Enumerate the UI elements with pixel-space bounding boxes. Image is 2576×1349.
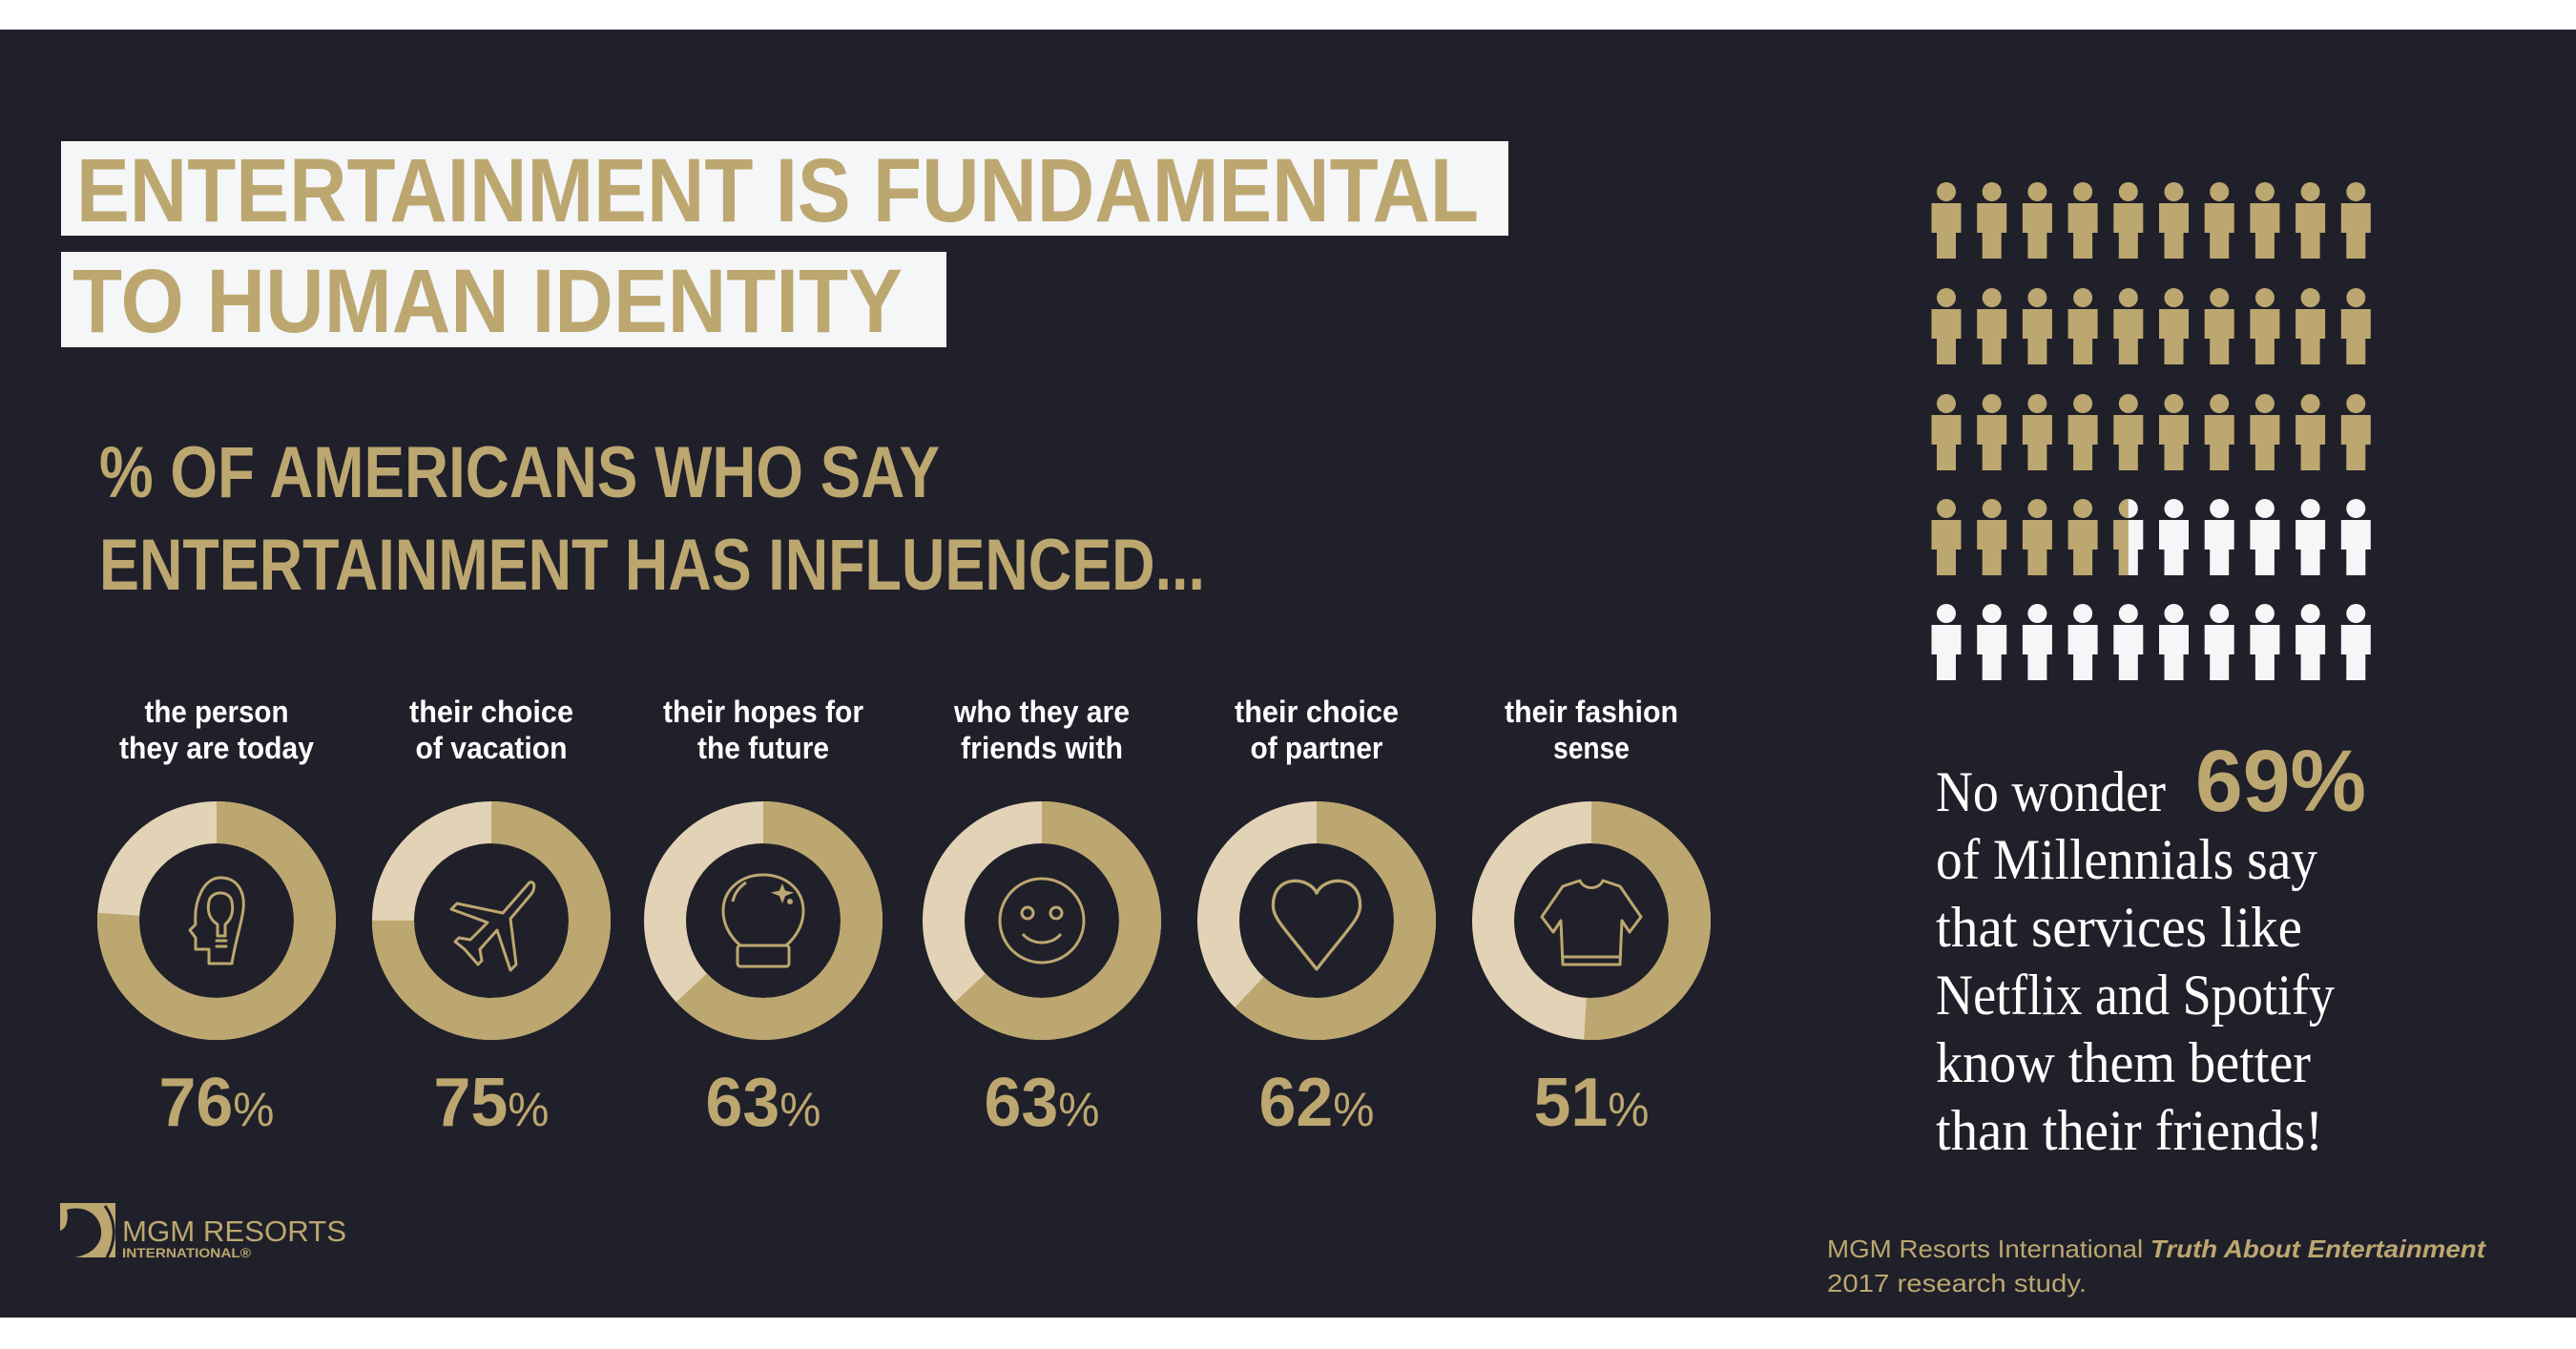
category labels: their hopes for <box>663 695 863 729</box>
source note: MGM Resorts International Truth About Entertainment <box>1827 1235 2486 1263</box>
icon: t-shirt <box>1542 881 1641 965</box>
icon: airplane <box>451 882 534 970</box>
subtitle: % OF AMERICANS WHO SAY <box>99 432 940 513</box>
logo: MGM Resorts: INTERNATIONAL® <box>122 1245 252 1260</box>
icon: heart <box>1273 881 1361 969</box>
category labels: friends with <box>961 731 1123 765</box>
category labels: of partner <box>1250 731 1383 765</box>
callout: 69% of Millennials: 69% <box>2195 733 2366 830</box>
donut: 76% <box>118 822 315 1019</box>
logo: MGM Resorts <box>60 1203 346 1260</box>
subtitle <box>99 432 1205 606</box>
percentages: 75% <box>433 1065 550 1141</box>
title: ENTERTAINMENT IS FUNDAMENTAL <box>76 140 1479 241</box>
callout: 69% of Millennials: than their friends! <box>1936 1099 2323 1162</box>
category labels: their fashion <box>1505 695 1678 729</box>
donut: 75% <box>393 822 590 1019</box>
logo: MGM Resorts: MGM RESORTS <box>122 1214 346 1248</box>
percentages: 76% <box>158 1065 275 1141</box>
pictogram: 69 of 100 people <box>1931 182 2371 680</box>
percentages <box>158 1065 1649 1141</box>
callout: 69% of Millennials: of Millennials say <box>1936 828 2317 891</box>
category labels: they are today <box>119 731 314 765</box>
donut: 63% hopes <box>665 822 862 1019</box>
category labels <box>119 695 1678 765</box>
source note <box>1827 1235 2486 1297</box>
callout: 69% of Millennials: know them better <box>1936 1031 2311 1094</box>
title: TO HUMAN IDENTITY <box>73 251 903 352</box>
percentages: 51% <box>1534 1065 1649 1141</box>
donut: 63% friends <box>944 822 1140 1019</box>
icon: crystal ball <box>723 875 803 966</box>
donut: 51% <box>1493 822 1690 1019</box>
subtitle: ENTERTAINMENT HAS INFLUENCED... <box>99 525 1205 606</box>
callout: 69% of Millennials: that services like <box>1936 896 2302 959</box>
category labels: their choice <box>1235 695 1399 729</box>
icon: head with bulb <box>190 878 243 964</box>
icon: smiley <box>1000 879 1084 963</box>
category labels: of vacation <box>416 731 567 765</box>
percentages: 63% <box>985 1065 1099 1141</box>
category labels: their choice <box>409 695 573 729</box>
category labels: the future <box>697 731 829 765</box>
donut: 62% <box>1218 822 1415 1019</box>
callout: 69% of Millennials <box>1936 733 2366 1162</box>
percentages: 63% <box>706 1065 821 1141</box>
percentages: 62% <box>1259 1065 1374 1141</box>
source note: 2017 research study. <box>1827 1269 2087 1297</box>
category labels: the person <box>145 695 288 729</box>
category labels: who they are <box>953 695 1130 729</box>
callout: 69% of Millennials: Netflix and Spotify <box>1936 964 2335 1027</box>
callout: 69% of Millennials: No wonder <box>1936 760 2166 823</box>
title <box>61 140 1508 352</box>
category labels: sense <box>1553 731 1630 765</box>
